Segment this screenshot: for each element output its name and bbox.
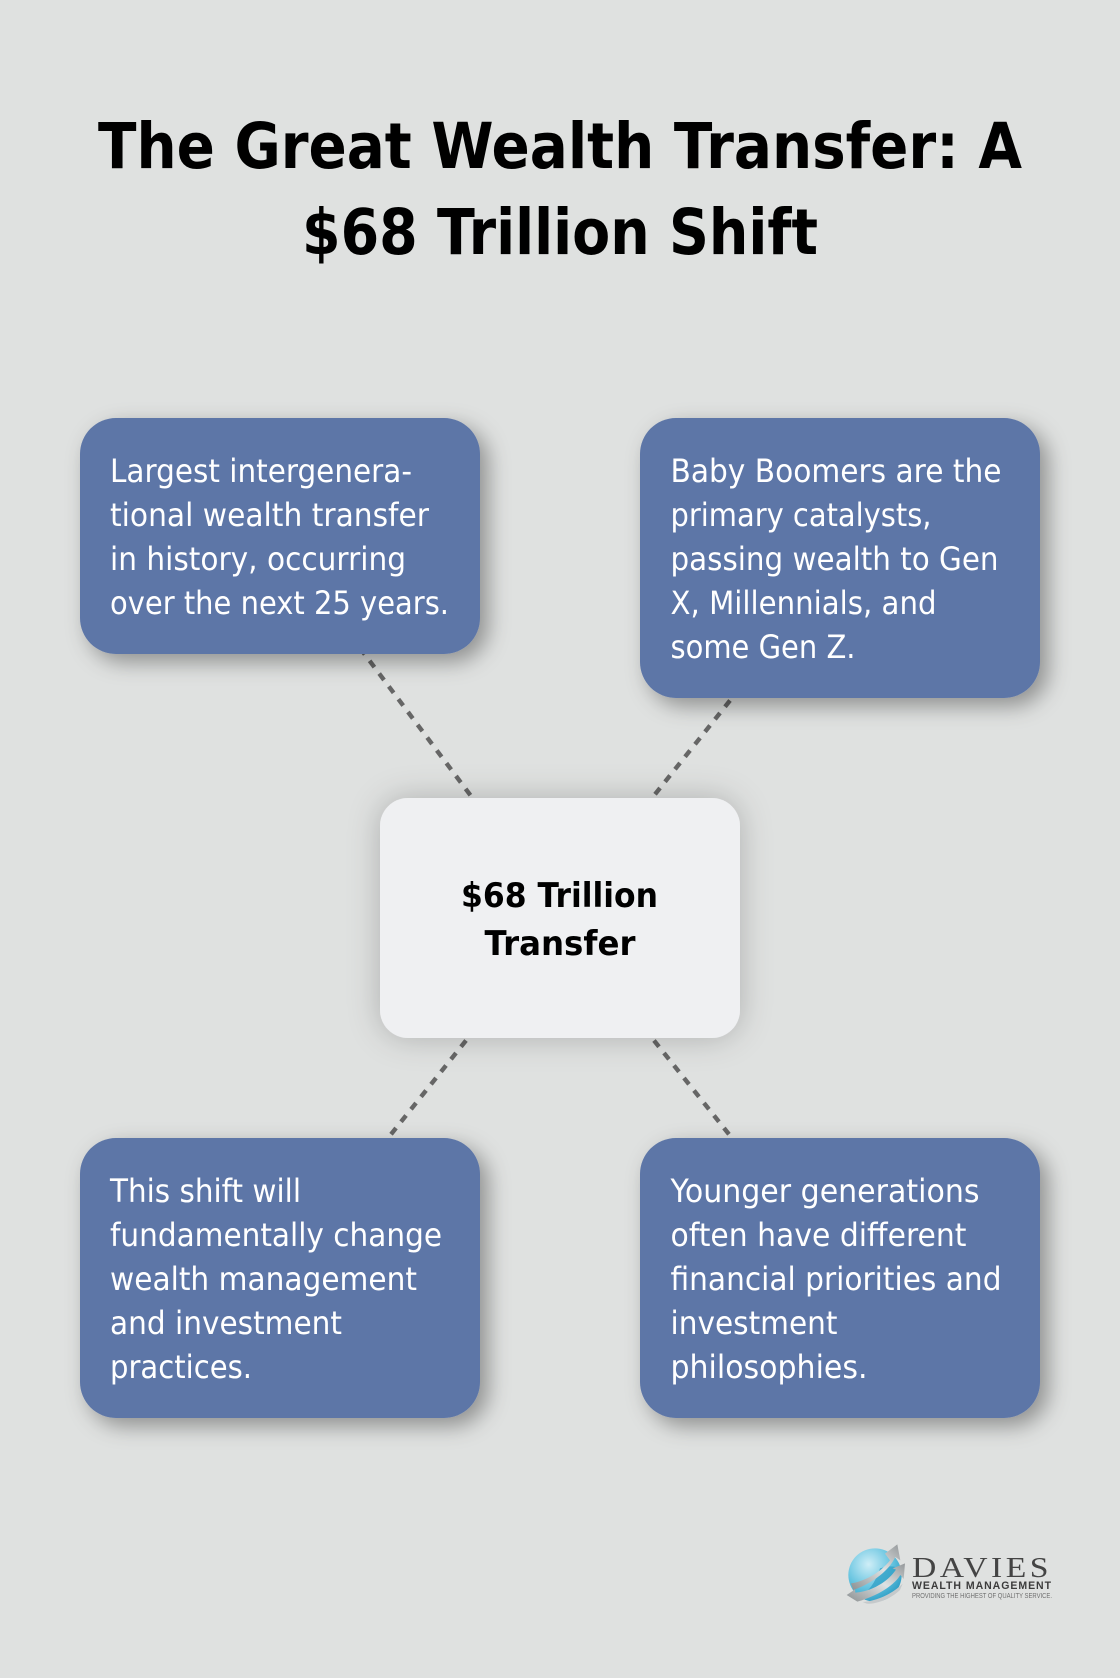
panel: center transfer: $68 Trillion [461, 876, 658, 916]
panel: baby boomers: some Gen Z. [670, 628, 856, 666]
title: $68 Trillion Shift [302, 196, 818, 269]
panel: wealth management change [80, 1138, 480, 1418]
connector: top-left panel to center [360, 648, 480, 808]
title: The Great Wealth Transfer: A [98, 110, 1022, 183]
panel: largest transfer [80, 418, 480, 654]
panel: younger generations: financial priorities and [670, 1260, 1002, 1298]
panel: center transfer: Transfer [484, 924, 636, 964]
panel: largest transfer: in history, occurring [110, 540, 406, 578]
connector: top-right panel to center [644, 688, 740, 808]
panel: wealth management change: and investment [110, 1304, 342, 1342]
panel: younger generations: philosophies. [670, 1348, 868, 1386]
panel: wealth management change: This shift will [109, 1172, 301, 1210]
connector: bottom-left panel to center [380, 1028, 476, 1148]
panel: wealth management change: wealth management [110, 1260, 417, 1298]
panel: center transfer [380, 798, 740, 1038]
panel: wealth management change: practices. [110, 1348, 252, 1386]
panel: younger generations: often have different [670, 1216, 966, 1254]
panel: younger generations: investment [670, 1304, 838, 1342]
connector: bottom-right panel to center [644, 1028, 740, 1148]
panel: largest transfer: Largest intergenera- [110, 452, 412, 490]
panel: younger generations [640, 1138, 1040, 1418]
panel: wealth management change: fundamentally change [110, 1216, 442, 1254]
panel: baby boomers [640, 418, 1040, 698]
logo tagline: PROVIDING THE HIGHEST OF QUALITY SERVICE. [912, 1593, 1052, 1600]
title [98, 110, 1022, 269]
panel: baby boomers: X, Millennials, and [670, 584, 936, 622]
panel: baby boomers: primary catalysts, [670, 496, 932, 534]
panel: largest transfer: tional wealth transfer [110, 496, 430, 534]
panel: younger generations: Younger generations [670, 1172, 980, 1210]
logo wordmark: DAVIES [912, 1552, 1052, 1584]
logo subtitle: WEALTH MANAGEMENT [912, 1580, 1052, 1592]
icon: globe with arrows [847, 1544, 905, 1604]
panel: baby boomers: Baby Boomers are the [670, 452, 1002, 490]
logo: Davies Wealth Management [847, 1544, 1052, 1604]
panel: largest transfer: over the next 25 years. [110, 584, 449, 622]
panel: baby boomers: passing wealth to Gen [670, 540, 998, 578]
